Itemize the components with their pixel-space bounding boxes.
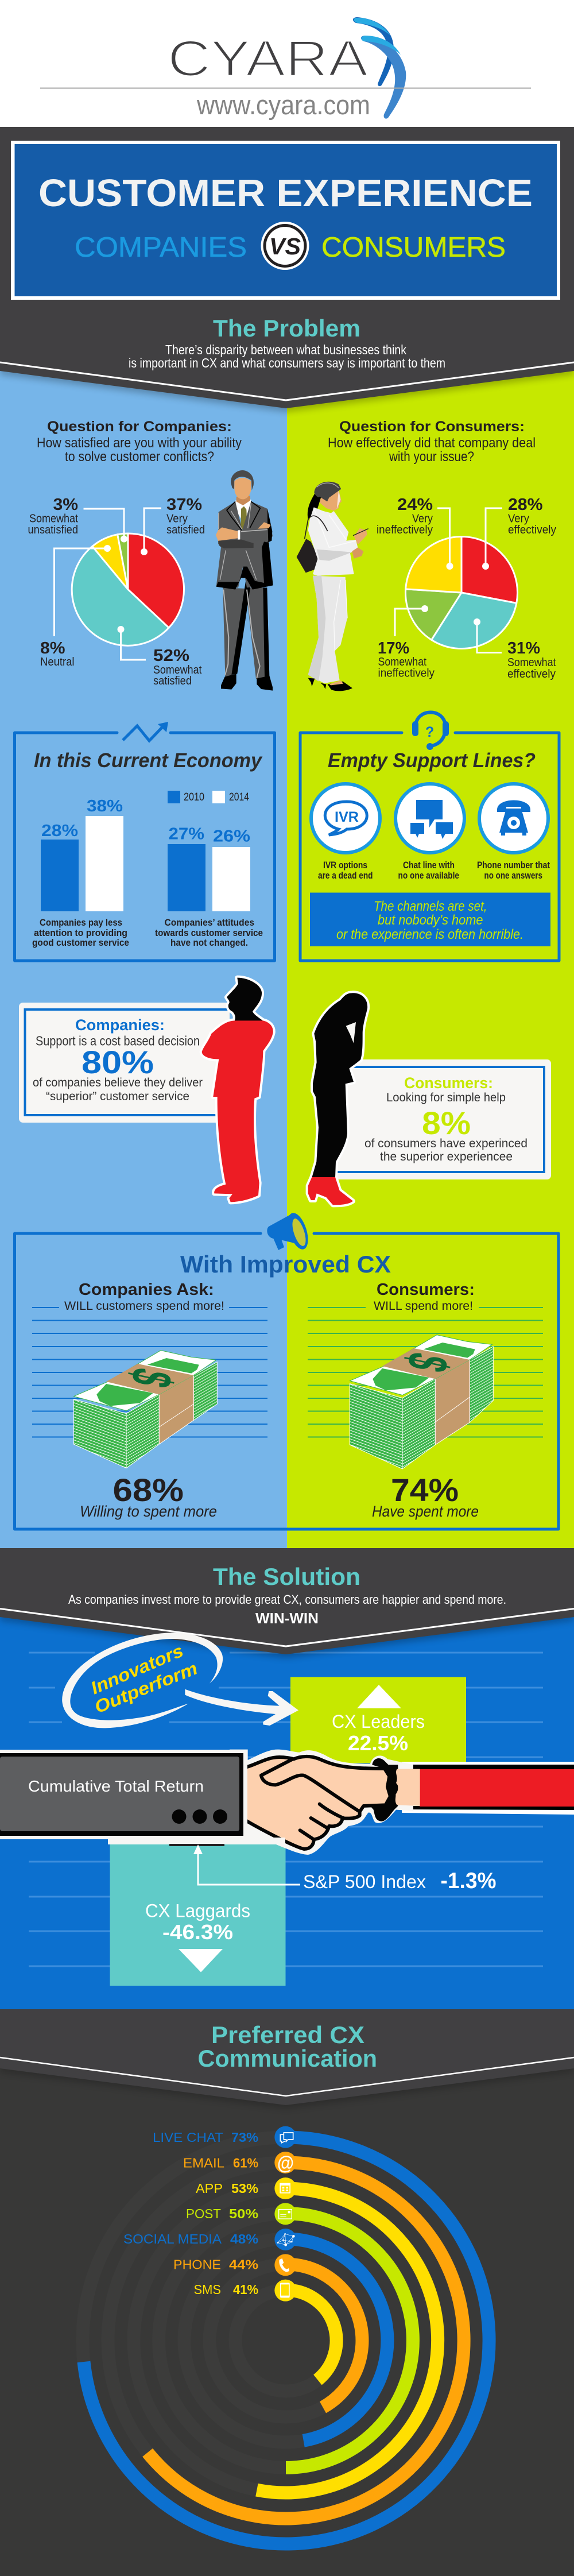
icon: headset with question mark — [412, 712, 449, 750]
background: two-colour split — [0, 368, 574, 1550]
callout: channels: but nobody’s home — [378, 912, 483, 928]
vs badge — [261, 222, 309, 270]
oval text: Outperform — [92, 1658, 200, 1717]
logo swoosh — [353, 17, 406, 119]
icon: money stack small: $ — [119, 1364, 185, 1393]
panel: with improved cx — [15, 1210, 559, 1529]
icon: money stack small — [73, 1351, 217, 1468]
have spent caption: Have spent more — [372, 1503, 479, 1520]
consumers subheading: WILL spend more! — [374, 1299, 473, 1313]
consumers heading: Consumers: — [377, 1281, 475, 1299]
callout line: Support is a cost based decision — [36, 1034, 200, 1049]
problem intro text — [129, 342, 445, 370]
chart guide lines — [29, 1653, 543, 1966]
label: app: APP — [196, 2181, 223, 2196]
question heading: Question for Consumers: — [339, 419, 525, 435]
solution band with chevron — [0, 1548, 574, 1658]
the problem heading: The Problem — [213, 315, 360, 342]
oval text — [88, 1641, 200, 1717]
bar chart: attitudes towards service — [168, 825, 250, 911]
74% stat: 74% — [391, 1472, 459, 1508]
box: cx leaders — [290, 1677, 466, 1763]
label: 8% neutral: Neutral — [40, 656, 75, 668]
icon: social media — [274, 2229, 296, 2250]
question text: to solve customer conflicts? — [65, 449, 214, 465]
icon: app — [274, 2177, 296, 2199]
icon: phone — [274, 2254, 296, 2276]
icon: up triangle — [357, 1685, 401, 1708]
label: app: 53% — [231, 2181, 258, 2196]
label: 28% very effectively: Very — [508, 512, 529, 525]
callout: channels: The channels are set, — [374, 899, 487, 914]
website url: www.cyara.com — [196, 90, 370, 120]
label: 52% somewhat satisfied: satisfied — [153, 675, 192, 687]
callout heading: Companies: — [75, 1016, 165, 1034]
label: 17% somewhat ineffectively: Somewhat — [378, 656, 426, 668]
companies subheading: WILL customers spend more! — [64, 1299, 224, 1313]
willing caption: Willing to spent more — [80, 1503, 217, 1520]
pie chart: companies — [72, 533, 184, 645]
label: post: 50% — [229, 2206, 258, 2221]
label: 37% very satisfied — [166, 496, 205, 536]
callout text: of companies believe they deliver — [33, 1076, 203, 1089]
blue solution background — [0, 1608, 574, 2009]
icon: businessman figure — [216, 470, 273, 691]
question text — [37, 435, 242, 465]
rule lines: consumers — [308, 1308, 543, 1437]
consumers label: CONSUMERS — [321, 232, 506, 263]
heading — [197, 2021, 377, 2072]
icon: telephone — [479, 784, 548, 853]
question text — [328, 435, 536, 465]
caption: phone: Phone number that — [477, 860, 550, 871]
title panel — [11, 141, 560, 300]
caption: ivr: are a dead end — [318, 870, 373, 881]
the problem heading — [129, 315, 445, 370]
label: phone: PHONE — [173, 2257, 221, 2272]
label: CX Laggards — [145, 1901, 250, 1921]
icon: businesswoman figure — [297, 482, 369, 691]
label: 28% very effectively: effectively — [508, 524, 556, 536]
communication band with chevron — [0, 2009, 574, 2109]
icon: female silhouette — [308, 993, 367, 1205]
ring: phone 44% — [286, 2264, 362, 2407]
rule lines: companies — [32, 1308, 267, 1437]
label: live chat: LIVE CHAT — [153, 2130, 223, 2145]
panel: empty support lines — [300, 712, 559, 961]
label: 31% somewhat effectively — [507, 639, 556, 680]
logo wordmark: CYARA — [168, 30, 368, 87]
ring: social media 48% — [286, 2239, 387, 2440]
panel heading: Empty Support Lines? — [328, 749, 536, 772]
icon: money stack large: $ — [395, 1348, 461, 1377]
radial bar chart — [83, 2137, 489, 2544]
bar chart: attitudes towards service: 26% — [213, 827, 250, 845]
icon: down triangle — [179, 1949, 223, 1972]
label: 17% somewhat ineffectively: ineffectively — [378, 667, 435, 680]
caption: attention: attention to providing — [34, 927, 127, 938]
chart labels — [123, 2130, 258, 2297]
callout: consumers — [328, 1059, 551, 1179]
caption: attention: Companies pay less — [40, 917, 122, 928]
handshake — [230, 1750, 420, 1855]
label: 8% neutral — [40, 639, 75, 668]
label: 28% very effectively: 28% — [508, 496, 543, 514]
header: logo and url — [0, 0, 574, 127]
problem intro text: There’s disparity between what businesses think — [165, 342, 406, 357]
panel: question for consumers — [328, 419, 556, 680]
value: 22.5% — [348, 1731, 408, 1755]
bar chart: attention to service: 28% — [41, 822, 78, 840]
caption: phone — [477, 860, 550, 881]
label: 31% somewhat effectively: 31% — [507, 639, 540, 657]
80% stat: 80% — [82, 1044, 154, 1080]
label: Cumulative Total Return — [28, 1777, 204, 1795]
bar chart: attitudes towards service: 27% — [169, 825, 204, 843]
label: 52% somewhat satisfied: Somewhat — [153, 664, 202, 676]
label: email: 61% — [233, 2156, 258, 2171]
icon: sms — [274, 2280, 296, 2302]
label: email — [183, 2156, 258, 2171]
label: 17% somewhat ineffectively: 17% — [378, 639, 409, 657]
ring: app 53% — [257, 2188, 438, 2493]
label: app — [196, 2181, 258, 2196]
label: sms: SMS — [194, 2282, 221, 2297]
label: social media: 48% — [230, 2231, 258, 2246]
win-win: WIN-WIN — [255, 1610, 319, 1627]
label: 37% very satisfied: satisfied — [166, 524, 205, 536]
label: 3% somewhat unsatisfied: Somewhat — [29, 512, 78, 525]
callout text — [364, 1137, 528, 1163]
value: -46.3% — [162, 1920, 233, 1944]
bar chart: attention to service — [41, 797, 123, 911]
label: sms: 41% — [233, 2282, 258, 2297]
sleeve: cumulative total return — [0, 1750, 285, 1844]
question text: How satisfied are you with your ability — [37, 435, 242, 451]
panel heading: In this Current Economy — [34, 749, 262, 772]
label: email: EMAIL — [183, 2156, 224, 2171]
caption: attention — [32, 917, 129, 948]
ring: post 50% — [286, 2214, 413, 2467]
label: post: POST — [186, 2206, 221, 2221]
label: social media: SOCIAL MEDIA — [123, 2231, 222, 2246]
8% stat: 8% — [422, 1105, 471, 1141]
icon: chat bubbles — [395, 784, 464, 853]
label: post — [186, 2206, 258, 2221]
label: 3% somewhat unsatisfied — [28, 496, 78, 536]
label: 31% somewhat effectively: effectively — [507, 668, 556, 680]
label: 3% somewhat unsatisfied: 3% — [53, 496, 78, 514]
68% stat: 68% — [113, 1472, 184, 1508]
oval text: Innovators — [88, 1641, 187, 1698]
icon: money stack large — [350, 1335, 493, 1469]
caption: ivr — [318, 860, 373, 881]
label: 24% very ineffectively: 24% — [397, 496, 433, 514]
heading: The Solution — [213, 1563, 360, 1590]
icon: ivr speech bubble — [311, 784, 380, 853]
icon: megaphone — [267, 1210, 312, 1252]
label: phone: 44% — [229, 2257, 258, 2272]
pie chart: consumers — [406, 536, 518, 649]
label: 24% very ineffectively — [377, 496, 433, 536]
dark intro band with chevron — [0, 127, 574, 412]
caption: chat — [398, 860, 459, 881]
label: sms — [194, 2282, 258, 2297]
legend: 2014 — [229, 791, 249, 803]
s&amp;p value: -1.3% — [441, 1869, 496, 1893]
question text: How effectively did that company deal — [328, 435, 536, 451]
legend: 2010 — [184, 791, 204, 803]
label: social media — [123, 2231, 258, 2246]
caption: chat: Chat line with — [403, 860, 455, 871]
callout: companies — [19, 1003, 238, 1123]
icon: headset with question mark: ? — [425, 724, 434, 740]
label: 28% very effectively — [508, 496, 556, 536]
heading: Preferred CX — [211, 2021, 364, 2048]
icon: email: @ — [277, 2152, 294, 2173]
label: 8% neutral: 8% — [40, 639, 65, 657]
preferred communication section — [0, 2009, 574, 2576]
question heading: Question for Companies: — [47, 419, 232, 435]
caption: phone: no one answers — [484, 870, 542, 881]
pie leaders: companies — [54, 508, 161, 660]
icon: ivr speech bubble: IVR — [335, 809, 359, 825]
caption: attitudes — [155, 917, 263, 948]
caption: attention: good customer service — [32, 937, 129, 948]
companies ask heading: Companies Ask: — [79, 1281, 214, 1299]
ring: live chat 73% — [84, 2137, 489, 2544]
caption: attitudes: towards customer service — [155, 927, 263, 938]
label: 17% somewhat ineffectively — [378, 639, 435, 680]
label: 3% somewhat unsatisfied: unsatisfied — [28, 524, 78, 536]
label: 24% very ineffectively: ineffectively — [377, 524, 433, 536]
callout: innovators outperform — [62, 1633, 298, 1728]
icon: live chat — [274, 2126, 296, 2148]
callout text — [33, 1076, 203, 1103]
intro text: As companies invest more to provide great CX, consumers are happier and spend more. — [68, 1592, 506, 1607]
icon: zigzag growth arrow — [123, 722, 168, 741]
background rings — [83, 2137, 489, 2544]
bar chart: attention to service: 38% — [87, 797, 123, 815]
icon: post — [274, 2203, 296, 2225]
cuff buttons — [172, 1809, 227, 1824]
s&amp;p label: S&P 500 Index — [303, 1871, 426, 1892]
callout text: “superior” customer service — [46, 1090, 189, 1103]
label: live chat — [153, 2130, 258, 2145]
pie leaders: consumers — [395, 508, 502, 652]
ring: email 61% — [148, 2163, 464, 2519]
label: 24% very ineffectively: Very — [412, 512, 433, 525]
label: 37% very satisfied: 37% — [166, 496, 202, 514]
panel: in this current economy — [15, 722, 274, 961]
label: CX Leaders — [332, 1711, 425, 1732]
arm and sleeve: right — [402, 1762, 574, 1815]
icon: male silhouette — [202, 978, 273, 1202]
s&amp;p 500 marker and arrow — [169, 1844, 496, 1893]
panel heading: With Improved CX — [180, 1251, 391, 1278]
callout text: the superior experiencee — [380, 1150, 513, 1163]
callout: channels: or the experience is often horrible. — [336, 927, 523, 942]
companies label: COMPANIES — [75, 232, 247, 263]
caption: attitudes: have not changed. — [170, 937, 248, 948]
label: phone — [173, 2257, 258, 2272]
caption: attitudes: Companies’ attitudes — [164, 917, 254, 928]
label: 52% somewhat satisfied — [153, 647, 202, 687]
label: live chat: 73% — [231, 2130, 258, 2145]
arrow to cx leaders — [185, 1689, 298, 1726]
callout heading: Consumers: — [404, 1074, 493, 1092]
label: 37% very satisfied: Very — [166, 512, 188, 525]
caption: ivr: IVR options — [323, 860, 367, 871]
callout line: Looking for simple help — [386, 1091, 506, 1104]
legend — [168, 791, 249, 803]
heading: Communication — [197, 2045, 377, 2072]
box: cx laggards — [110, 1844, 286, 1986]
label: 31% somewhat effectively: Somewhat — [507, 656, 556, 669]
question text: with your issue? — [389, 449, 474, 465]
vs badge: VS — [269, 233, 301, 260]
ring: sms 41% — [286, 2290, 336, 2380]
callout text: of consumers have experinced — [364, 1137, 528, 1150]
callout: channels — [310, 892, 550, 946]
hand-drawn oval — [62, 1633, 223, 1728]
caption: chat: no one available — [398, 870, 459, 881]
label: 52% somewhat satisfied: 52% — [153, 647, 189, 665]
panel: question for companies — [28, 419, 242, 687]
main title: CUSTOMER EXPERIENCE — [38, 172, 533, 215]
problem intro text: is important in CX and what consumers say is important to them — [129, 355, 445, 370]
